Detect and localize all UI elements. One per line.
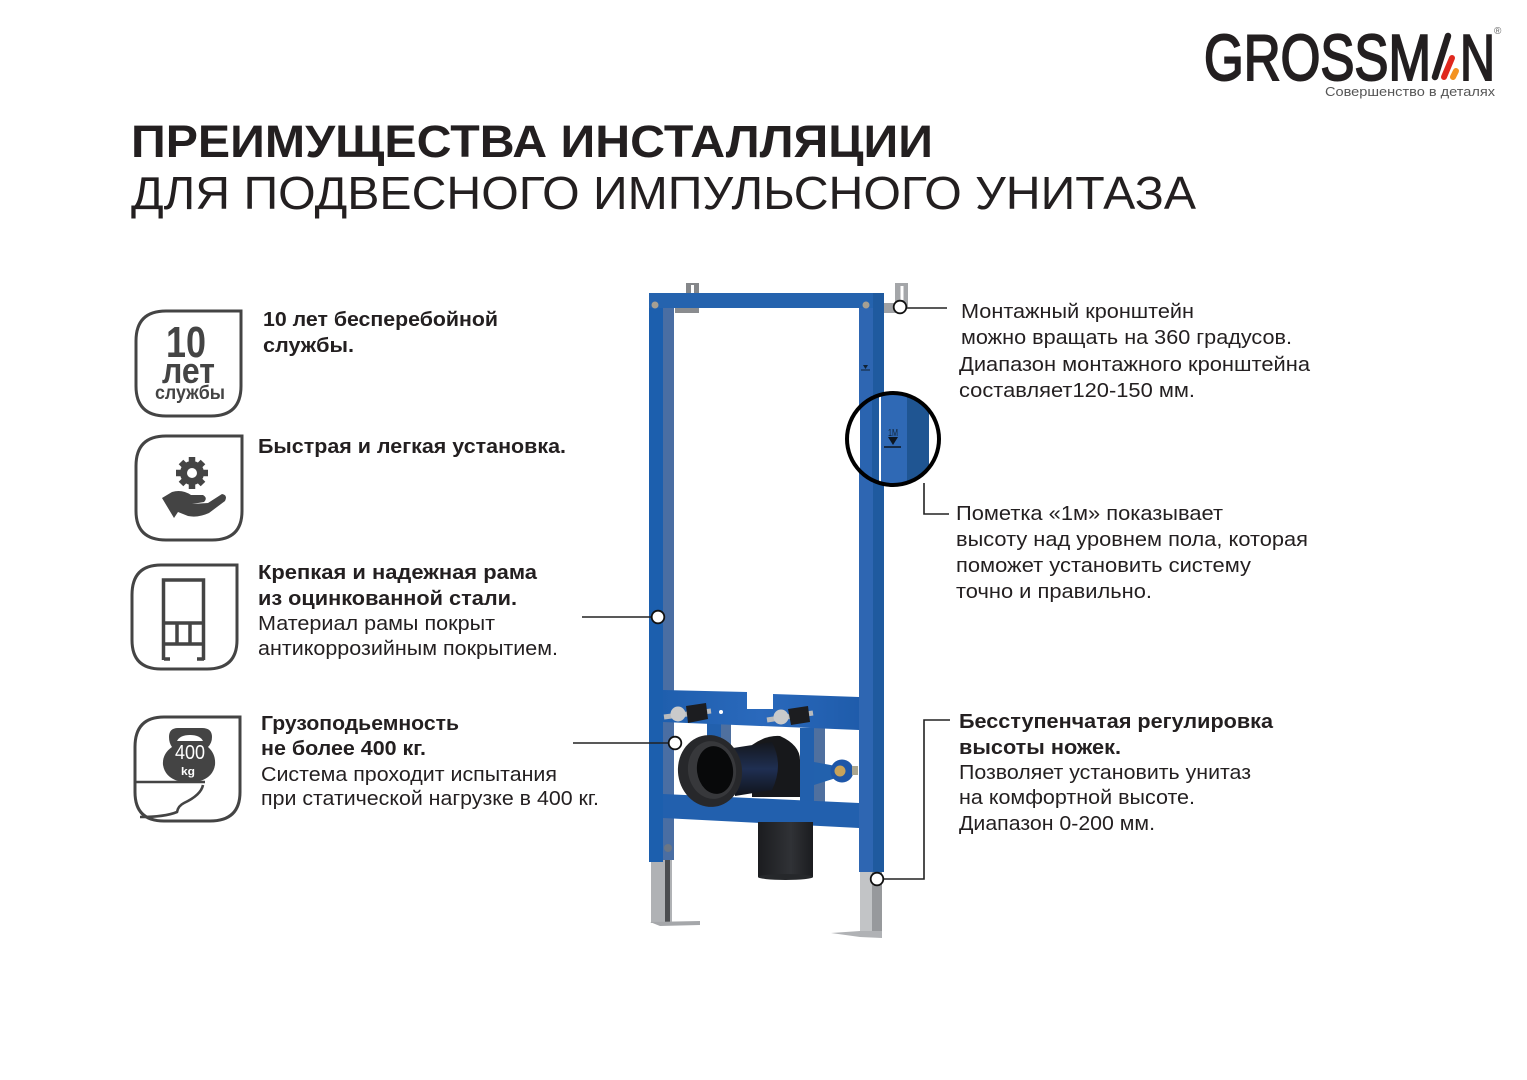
text: height adjustment: Бесступенчатая регулировка [959, 710, 1274, 733]
icon: 10 years of service: 10 [166, 318, 206, 367]
text: frame: Крепкая и надежная рама [258, 561, 538, 584]
icon: 10 years of service [136, 311, 241, 416]
text: load capacity: не более 400 кг. [261, 737, 426, 760]
water inlet [830, 760, 858, 782]
bolts [664, 703, 813, 725]
text: mounting bracket: можно вращать на 360 градусов. [961, 326, 1292, 349]
text: 10 years [263, 308, 498, 357]
text: 1m mark: поможет установить систему [956, 554, 1252, 577]
text: load capacity: Грузоподьемность [261, 712, 459, 735]
icon: 400 kg load: 400 [175, 742, 205, 764]
text: load capacity: Система проходит испытания [261, 763, 557, 786]
cross bars [663, 690, 859, 828]
icon: 400 kg load: kg [181, 766, 195, 778]
text: load capacity [261, 712, 599, 810]
text: 1m mark: высоту над уровнем пола, которая [956, 528, 1308, 551]
text: frame: Материал рамы покрыт [258, 612, 496, 635]
magnifier: 1m mark: 1М [888, 428, 898, 439]
brackets [675, 283, 908, 313]
callout: bracket line and marker [894, 301, 947, 313]
text: 10 years: службы. [263, 334, 354, 357]
text: quick installation: Быстрая и легкая установка. [258, 435, 566, 458]
magnifier: 1m mark [847, 390, 939, 488]
inner uprights [707, 722, 836, 802]
title: ДЛЯ ПОДВЕСНОГО ИМПУЛЬСНОГО УНИТАЗА [131, 167, 1196, 219]
callout: frame leader line and marker [582, 611, 664, 623]
icon: frame [132, 565, 237, 669]
icon: 10 years of service: лет [162, 350, 215, 391]
title: ПРЕИМУЩЕСТВА ИНСТАЛЛЯЦИИ [131, 116, 933, 167]
text: frame [258, 561, 558, 660]
callout: 1m leader line [924, 483, 949, 514]
logo: GROSSMAN: N [1460, 21, 1495, 94]
icon: 400 kg load [135, 717, 240, 821]
installation frame illustration [649, 283, 908, 938]
text: load capacity: при статической нагрузке в 400 кг. [261, 787, 599, 810]
icon: 10 years of service: службы [155, 383, 225, 404]
text: mounting bracket: Монтажный кронштейн [961, 300, 1194, 323]
text: 1m mark [956, 502, 1308, 603]
callout: load leader line and marker [573, 737, 681, 749]
callout: legs leader line and marker [871, 720, 950, 885]
legs [650, 860, 882, 938]
text: 1m mark: точно и правильно. [956, 580, 1152, 603]
text: height adjustment: высоты ножек. [959, 736, 1121, 759]
text: height adjustment: на комфортной высоте. [959, 786, 1195, 809]
text: mounting bracket: Диапазон монтажного кронштейна [959, 353, 1311, 376]
icon: easy installation [136, 436, 242, 540]
text: frame: из оцинкованной стали. [258, 587, 517, 610]
logo: GROSSMAN: GROSSM [1204, 21, 1431, 94]
logo: GROSSMAN: Совершенство в деталях [1325, 84, 1496, 99]
text: frame: антикоррозийным покрытием. [258, 637, 558, 660]
text: height adjustment [959, 710, 1274, 835]
text: mounting bracket [959, 300, 1311, 402]
text: 1m mark: Пометка «1м» показывает [956, 502, 1224, 525]
text: height adjustment: Диапазон 0-200 мм. [959, 812, 1155, 835]
text: 10 years: 10 лет бесперебойной [263, 308, 498, 331]
drain pipe [673, 731, 813, 880]
text: mounting bracket: составляет120-150 мм. [959, 379, 1195, 402]
logo: GROSSMAN: ® [1494, 26, 1502, 37]
text: height adjustment: Позволяет установить унитаз [959, 761, 1251, 784]
title [131, 116, 1196, 219]
frame posts and top bar [649, 293, 884, 872]
